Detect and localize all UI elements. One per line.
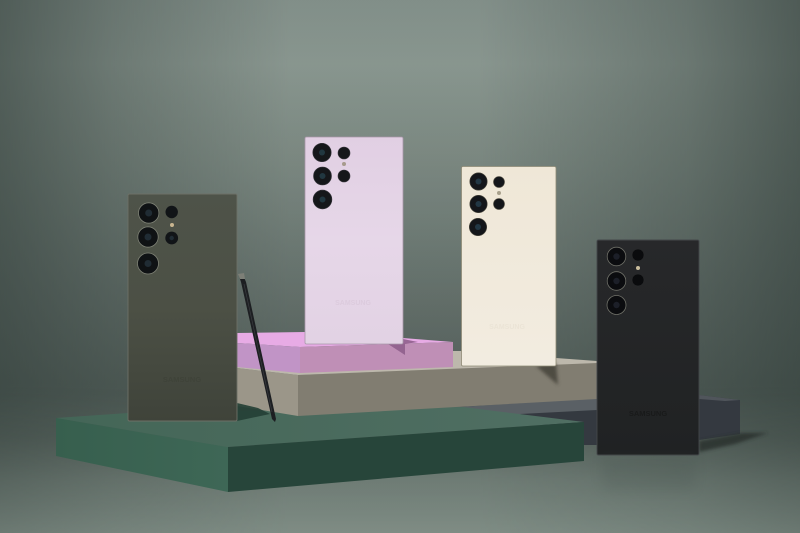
taupe plinth [237, 351, 597, 416]
plinth floor shadow [699, 433, 768, 452]
reflection: black phone on floor [600, 456, 697, 490]
shadow: green phone on green plinth [237, 403, 270, 421]
phone: green [128, 194, 237, 421]
s pen [238, 273, 276, 422]
navy plinth [460, 395, 740, 445]
shadow: lavender phone on pink plinth [388, 339, 418, 355]
shadow: cream phone on taupe plinth [536, 363, 558, 385]
phone: green: SAMSUNG [163, 375, 201, 384]
pink plinth [237, 332, 453, 373]
green plinth [56, 407, 584, 492]
phone: cream: SAMSUNG [489, 324, 525, 331]
phone: black [597, 240, 699, 455]
phone: black: SAMSUNG [629, 409, 667, 418]
phone: lavender: SAMSUNG [335, 300, 371, 307]
phone: lavender [305, 137, 403, 344]
phone: cream [462, 166, 556, 366]
